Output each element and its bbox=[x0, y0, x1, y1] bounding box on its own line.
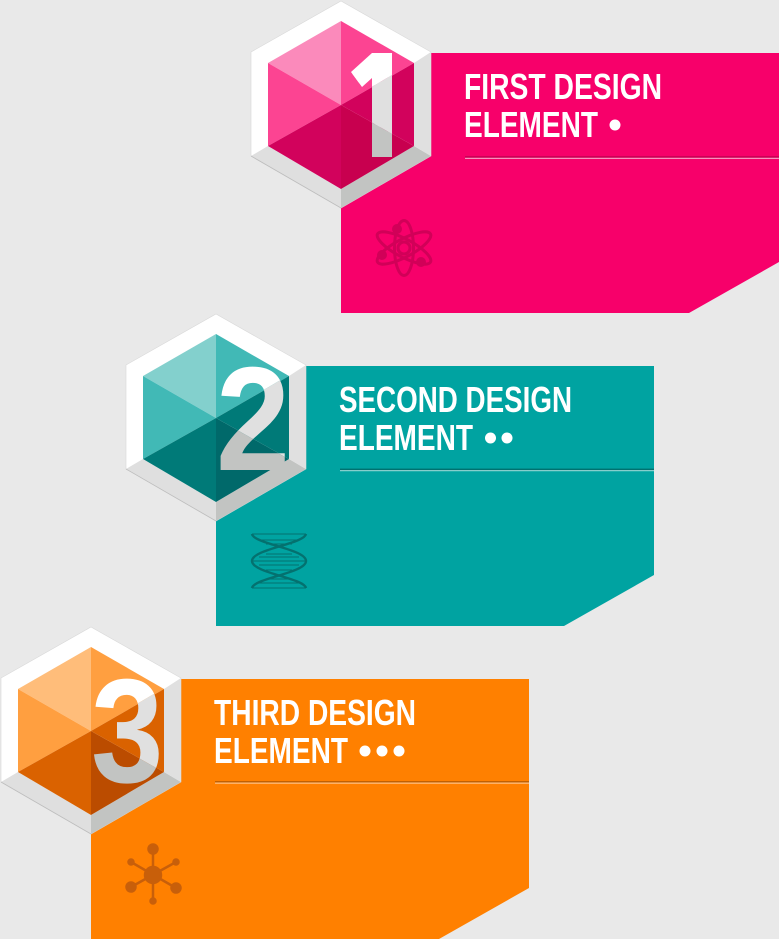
heading bbox=[464, 66, 662, 145]
hexagon: orange cube bbox=[1, 627, 181, 834]
numeral 1: 1 bbox=[343, 23, 419, 189]
card: teal bbox=[216, 366, 654, 626]
numeral 2 bbox=[220, 366, 285, 470]
numeral 3: 3 bbox=[91, 648, 163, 814]
heading bbox=[214, 692, 416, 771]
card: orange bbox=[91, 679, 529, 939]
heading bbox=[339, 379, 572, 458]
numeral 1 bbox=[351, 53, 392, 157]
heading: ELEMENT bbox=[214, 730, 348, 771]
numeral 2: 2 bbox=[216, 337, 290, 502]
hexagon: pink cube bbox=[251, 1, 431, 208]
icon: molecule bbox=[126, 844, 180, 904]
numeral 3: 3 bbox=[91, 648, 163, 814]
numeral 2: 2 bbox=[216, 337, 290, 502]
panel: second design element bbox=[126, 314, 654, 626]
heading: ELEMENT bbox=[464, 104, 598, 145]
card: pink bbox=[341, 53, 779, 313]
hexagon: teal cube bbox=[126, 314, 306, 521]
heading: THIRD DESIGN bbox=[214, 692, 416, 733]
panel: first design element bbox=[251, 1, 779, 313]
heading: FIRST DESIGN bbox=[464, 66, 662, 107]
numeral 2: 2 bbox=[216, 337, 290, 502]
panel: third design element bbox=[1, 627, 529, 939]
icon: dna helix bbox=[252, 534, 306, 588]
numeral 1: 1 bbox=[343, 23, 419, 189]
numeral 3: 3 bbox=[91, 648, 163, 814]
icon: atom bbox=[373, 220, 435, 276]
numeral 1: 1 bbox=[343, 23, 419, 189]
numeral 3 bbox=[94, 678, 159, 784]
heading: ELEMENT bbox=[339, 417, 473, 458]
heading: SECOND DESIGN bbox=[339, 379, 572, 420]
